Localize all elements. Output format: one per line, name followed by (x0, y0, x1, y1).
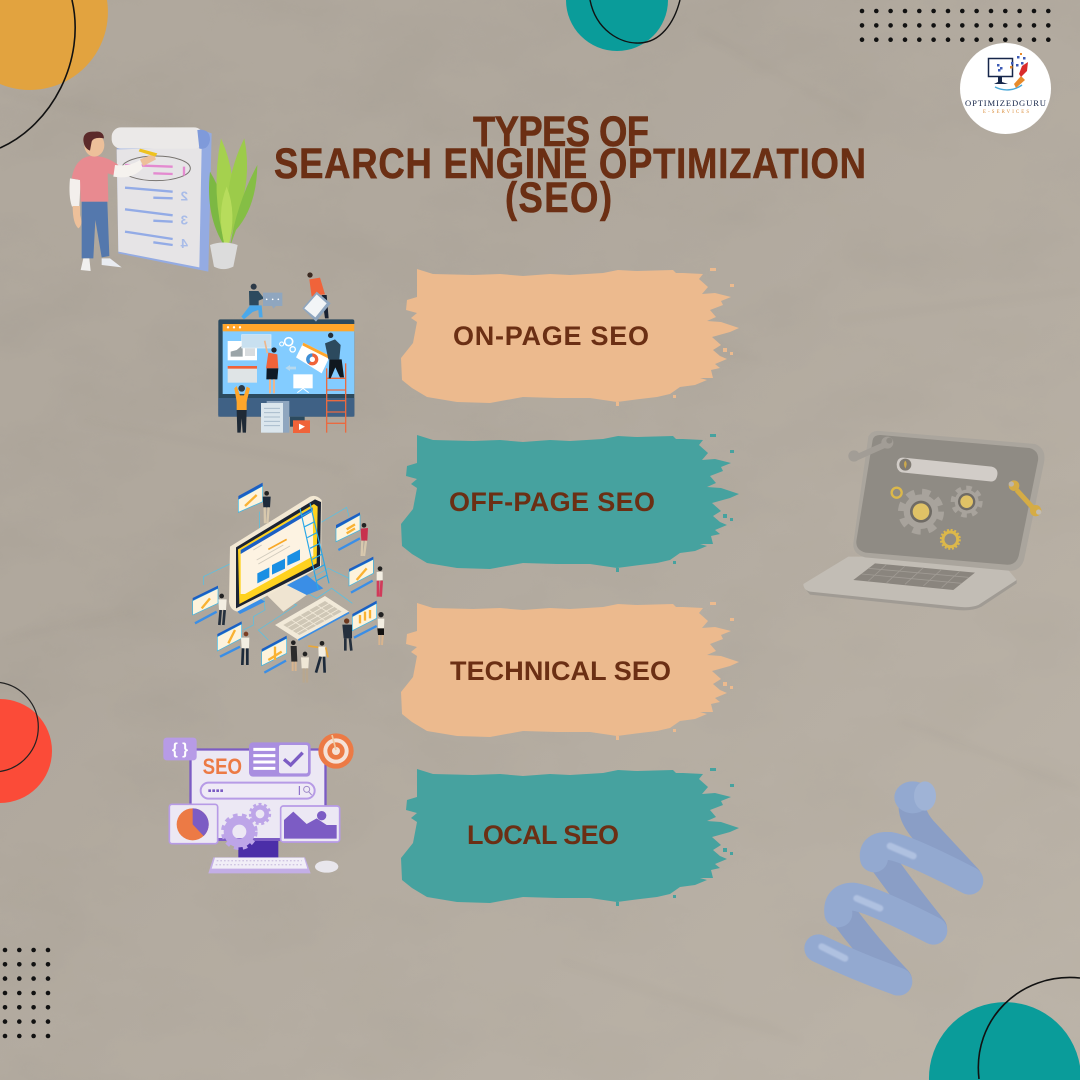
monitor: SEO (203, 754, 242, 779)
checklist notepad (112, 127, 212, 272)
braces tile (163, 738, 197, 760)
decorative circle: teal bottom right (929, 977, 1080, 1080)
card headers (193, 483, 377, 652)
title: (SEO) (505, 175, 612, 222)
large gear (902, 492, 940, 531)
image card (281, 806, 340, 842)
spring open end (894, 781, 936, 813)
laptop base (803, 557, 1017, 610)
ladder (300, 503, 329, 590)
decorative circle: red left (0, 682, 52, 803)
icon: computer monitor with pixels and rocket (988, 53, 1028, 90)
gray wrench (848, 437, 893, 462)
brush label: On-page SEO (401, 268, 739, 406)
illustration: blue 3D spring (818, 781, 969, 982)
illustration: purple SEO dashboard (163, 733, 354, 873)
checklist card (249, 742, 311, 777)
potted plant (209, 138, 257, 269)
monitor (218, 319, 354, 417)
connectors (203, 507, 352, 640)
yellow small gear (941, 530, 960, 549)
decorative circle: teal top (566, 0, 680, 51)
pie chart card (169, 804, 218, 844)
yellow ring (892, 488, 902, 498)
floor bars (195, 538, 377, 673)
ladder (327, 363, 346, 433)
illustration: on-page SEO monitor with team (218, 272, 354, 433)
checklist notepad: 3 (181, 212, 188, 227)
brush label: Off-page SEO: OFF-PAGE SEO (449, 487, 655, 517)
title (274, 109, 866, 222)
yellow wrench (1009, 480, 1041, 516)
man in pink shirt (69, 132, 157, 271)
title: SEARCH ENGINE OPTIMIZATION (274, 141, 866, 188)
logo wordmark: OPTIMIZEDGURU (965, 98, 1047, 108)
logo: OptimizedGuru E-Services (960, 43, 1051, 134)
brush label: Technical SEO: TECHNICAL SEO (450, 656, 671, 686)
team figures (234, 272, 344, 433)
spring back coils (840, 797, 968, 980)
mouse (315, 861, 338, 873)
search bar (897, 458, 997, 481)
braces tile: { } (172, 741, 188, 758)
monitor (189, 748, 327, 841)
logo tagline: E-SERVICES (983, 110, 1029, 115)
medium gear (953, 488, 980, 515)
people (218, 491, 384, 683)
illustration: laptop with gears and wrenches (803, 431, 1044, 610)
dot grid: top right (860, 9, 1051, 42)
keyboard (208, 857, 311, 873)
floating cards (193, 486, 377, 666)
illustration: man marking a numbered checklist with a plant (69, 127, 257, 272)
documents and play button (261, 401, 310, 433)
keyboard (275, 596, 349, 640)
card glyphs (202, 495, 370, 660)
spring front coils (818, 846, 969, 982)
brush label: Off-page SEO (401, 434, 739, 572)
target (318, 733, 354, 769)
search bar (201, 783, 315, 799)
dot grid: bottom left (3, 948, 50, 1038)
checklist notepad: 2 (181, 189, 188, 204)
brush label: Local SEO: LOCAL SEO (467, 820, 619, 850)
checklist notepad: 4 (180, 236, 188, 251)
spring highlights (822, 846, 913, 958)
brush label: Technical SEO (401, 602, 739, 740)
illustration: isometric monitor with web team (193, 483, 384, 683)
laptop lid (853, 431, 1044, 571)
brush label: On-page SEO: ON-PAGE SEO (453, 321, 649, 351)
gears (223, 804, 270, 848)
computer screen (229, 496, 323, 614)
title: TYPES OF (473, 109, 649, 156)
stand (238, 838, 278, 858)
decorative circle: orange top left (0, 0, 108, 148)
brush label: Local SEO (401, 768, 739, 906)
